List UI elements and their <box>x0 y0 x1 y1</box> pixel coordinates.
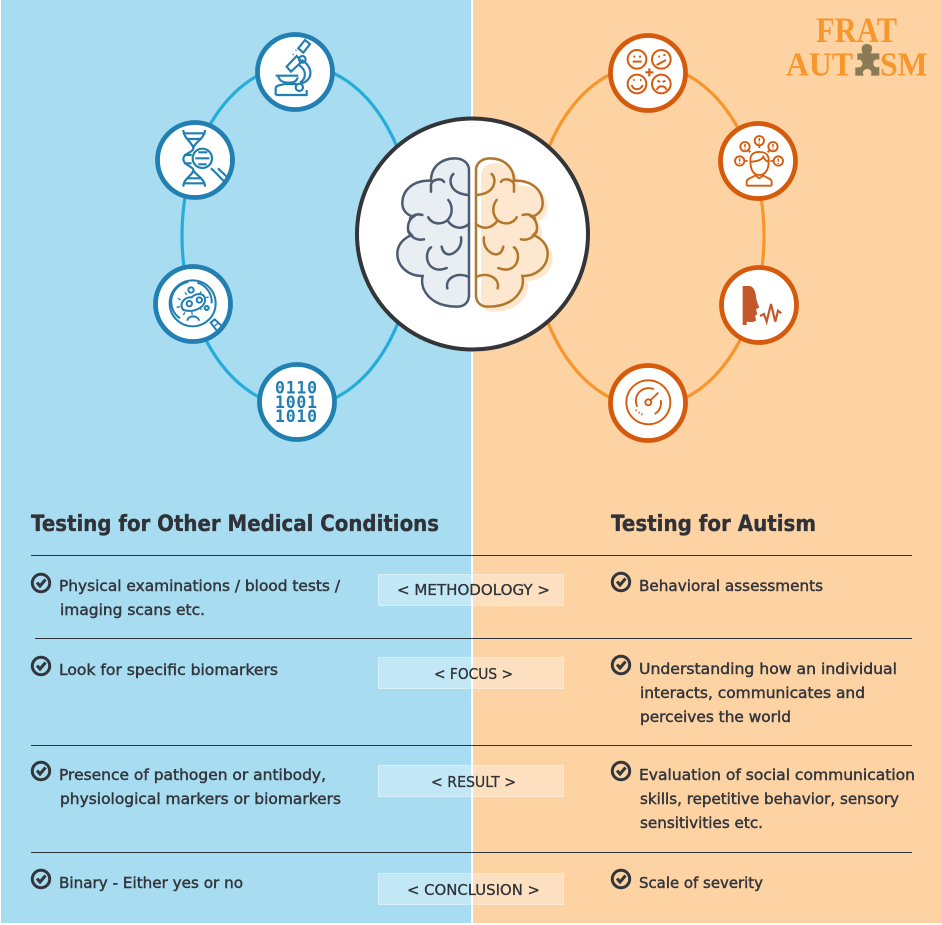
logo: Frat Autism <box>786 10 928 84</box>
text: right: Understanding how an individual <box>639 660 897 678</box>
text: right: Behavioral assessments <box>639 577 823 595</box>
text: left: Physical examinations / blood tests / <box>59 577 341 595</box>
brain: left hemisphere <box>397 158 469 307</box>
check: right <box>612 870 630 888</box>
icon: person with alert bubbles <box>720 124 796 198</box>
text: left: Look for specific biomarkers <box>59 661 278 679</box>
label: result: < RESULT > <box>431 773 516 791</box>
text: right <box>639 766 915 832</box>
row: conclusion <box>32 870 763 904</box>
icon: DNA with magnifier <box>158 122 232 198</box>
icon: microscope <box>258 34 332 110</box>
heading: left column: Testing for Other Medical Conditions <box>31 512 439 537</box>
icon: four emotion faces <box>610 36 686 110</box>
check: left <box>32 762 50 780</box>
heading: right column: Testing for Autism <box>611 512 816 537</box>
label: conclusion <box>378 874 564 904</box>
label: methodology <box>378 574 564 606</box>
check: left <box>32 657 50 675</box>
ring: orange ellipse <box>532 65 764 407</box>
label: methodology: < METHODOLOGY > <box>397 581 550 599</box>
text: left: imaging scans etc. <box>60 601 205 619</box>
logo: Frat Autism: AUT <box>786 46 853 84</box>
panel: blue left background <box>1 0 471 923</box>
icon: binary digits <box>260 364 334 440</box>
check: left <box>32 574 50 592</box>
text: right: skills, repetitive behavior, sensory <box>640 790 899 808</box>
label: result <box>378 766 564 796</box>
text: right: Scale of severity <box>639 874 763 892</box>
text: left: Presence of pathogen or antibody, <box>59 766 326 784</box>
label: focus: < FOCUS > <box>434 665 513 683</box>
check: right <box>612 762 630 780</box>
icon: binary digits: 1001 <box>275 393 317 412</box>
check: left <box>32 870 50 888</box>
icon: binary digits: 1010 <box>275 407 317 426</box>
text: right: interacts, communicates and <box>640 684 865 702</box>
icon: gauge dial <box>610 366 686 440</box>
icon: bacteria under magnifier <box>156 266 230 342</box>
check: right <box>612 656 630 674</box>
text: left <box>59 577 341 619</box>
logo: Frat Autism: FRAT <box>816 10 897 50</box>
row: result <box>32 762 915 832</box>
text: left: physiological markers or biomarkers <box>60 790 341 808</box>
text: right: perceives the world <box>640 708 791 726</box>
icon: puzzle piece <box>855 44 879 76</box>
icon: binary digits: 0110 <box>275 378 317 398</box>
panel: orange right background <box>473 0 942 923</box>
label: conclusion: < CONCLUSION > <box>407 881 540 899</box>
text: left <box>59 766 341 808</box>
row: focus <box>32 656 897 726</box>
icon: speaking head with sound wave <box>722 268 796 342</box>
text: right: sensitivities etc. <box>640 814 763 832</box>
label: focus <box>378 658 564 688</box>
logo: Frat Autism: SM <box>880 46 928 84</box>
row: methodology <box>32 573 823 619</box>
ring: blue ellipse <box>182 65 414 407</box>
text: left: Binary - Either yes or no <box>59 874 243 892</box>
brain: right hemisphere <box>476 158 553 312</box>
text: right <box>639 660 897 726</box>
text: right: Evaluation of social communication <box>639 766 915 784</box>
central brain medallion <box>357 118 588 350</box>
check: right <box>612 573 630 591</box>
